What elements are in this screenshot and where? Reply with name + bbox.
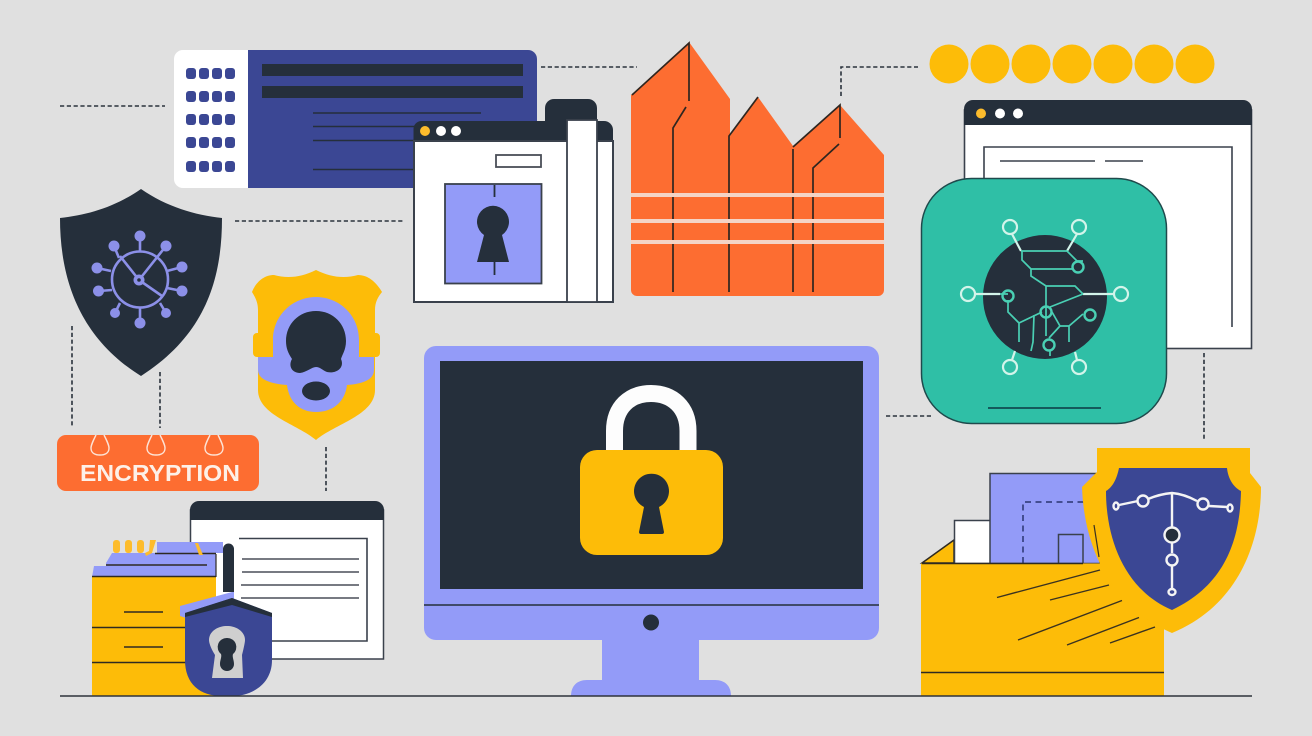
panel: teal circuit tile: [922, 178, 1166, 424]
icon: virus network: [97, 237, 182, 323]
panel: yellow folder with documents: [921, 448, 1261, 696]
card text bars: [262, 64, 523, 170]
tag: ENCRYPTION label: ENCRYPTION: [80, 460, 240, 486]
icon: virus hub: [134, 274, 144, 286]
monitor stand: [571, 640, 731, 696]
icon: circuit traces: [1000, 251, 1096, 356]
row of yellow dots: [930, 44, 1214, 84]
panel: bottom left browser window: [190, 501, 384, 659]
keyhole panel: [445, 184, 542, 284]
panel: yellow police-style badge: [252, 270, 382, 440]
icon: tag loops: [91, 435, 223, 455]
panel: computer monitor: [424, 346, 879, 696]
panel: dark shield with virus icon: [60, 189, 222, 376]
grid of card dots: [186, 68, 235, 172]
tag: ENCRYPTION label: [57, 435, 259, 491]
icon: blue padlock shield: [180, 592, 272, 696]
panel: top right browser window: [964, 100, 1252, 348]
icon: yellow padlock: [580, 394, 723, 555]
panel: orange server building chart: [631, 42, 884, 296]
icon: blue shield with yellow border: [1082, 448, 1261, 633]
icon: outer network nodes: [961, 220, 1128, 374]
panel: yellow filing cabinet: [92, 540, 234, 696]
panel: blue data card: [174, 50, 537, 188]
panel: browser window with keyhole: [414, 99, 613, 302]
icon: yellow binder clips: [113, 540, 203, 556]
